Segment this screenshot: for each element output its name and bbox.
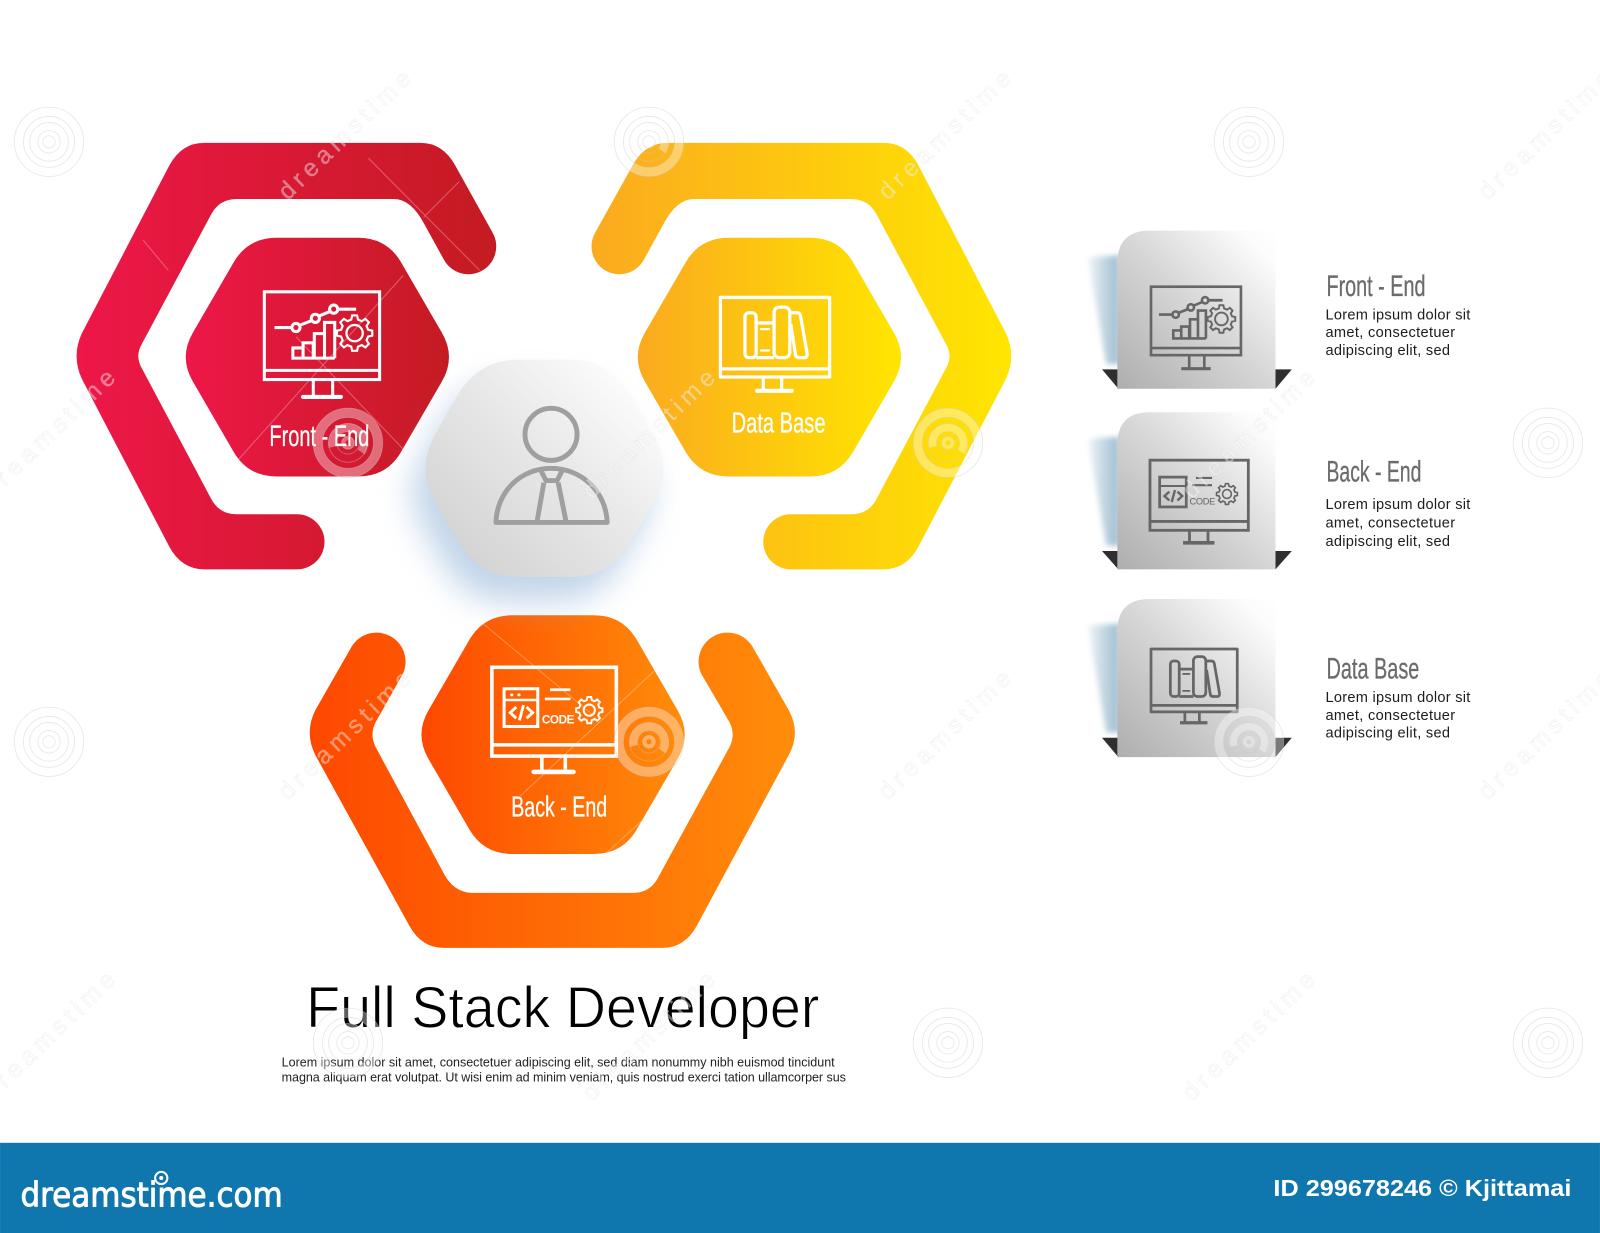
title: Full Stack Developer [306, 975, 819, 1040]
watermark pattern: dreamstime [1177, 966, 1321, 1106]
panel: front-end hexagon [186, 238, 449, 477]
image id and credit: ID 299678246 © Kjittamai [1273, 1175, 1571, 1201]
text block: back-end description [1325, 456, 1470, 550]
logo: dreamstime.com: dreamstime.com [20, 1176, 283, 1215]
text block: front-end description: Front - End [1327, 270, 1425, 303]
text block: data base description: Lorem ipsum dolor sit [1325, 690, 1470, 706]
side card: front-end [1088, 231, 1292, 389]
subtitle text [282, 1055, 846, 1085]
subtitle text: Lorem ipsum dolor sit amet, consectetuer adipiscing elit, sed diam nonummy nibh euismod tincidunt [282, 1055, 835, 1069]
watermark pattern: dreamstime [273, 665, 417, 805]
label: front-end: Front - End [269, 420, 369, 453]
icon: grey monitor with chart [1151, 287, 1241, 369]
text block: data base description: adipiscing elit, sed [1325, 726, 1450, 742]
panel: data base hexagon [638, 238, 901, 477]
panel: back-end outer ring [310, 633, 795, 948]
panel: data base outer ring [592, 143, 1011, 569]
panel: center person hexagon [426, 360, 663, 577]
panel: back-end hexagon [421, 615, 685, 854]
watermark pattern: dreamstime [1177, 364, 1321, 504]
icon: monitor with books [720, 297, 830, 391]
center hexagon shadow [413, 384, 651, 602]
text block: back-end description: adipiscing elit, sed [1325, 534, 1450, 550]
watermark pattern: dreamstime [577, 364, 721, 504]
text block: front-end description: Lorem ipsum dolor sit [1325, 307, 1470, 323]
text block: data base description [1325, 653, 1470, 742]
text block: back-end description: amet, consectetuer [1325, 516, 1455, 532]
text block: front-end description: amet, consectetuer [1325, 325, 1455, 341]
label: back-end: Back - End [511, 791, 607, 823]
icon: grey monitor with code [1150, 460, 1248, 543]
text block: front-end description [1325, 270, 1470, 359]
text block: back-end description: Lorem ipsum dolor sit [1325, 497, 1470, 513]
subtitle text: magna aliquam erat volutpat. Ut wisi enim ad minim veniam, quis nostrud exerci tation ullamcorper sus [282, 1071, 846, 1085]
text block: data base description: amet, consectetuer [1325, 708, 1455, 724]
icon: monitor with code window and gear [492, 667, 616, 772]
icon: grey monitor with books [1151, 649, 1237, 723]
icon: person with tie [496, 408, 607, 522]
watermark pattern: dreamstime [873, 665, 1017, 805]
watermark pattern: dreamstime [873, 65, 1017, 205]
footer band [0, 1143, 1600, 1233]
watermark pattern: dreamstime [577, 966, 721, 1106]
icon: monitor with chart and gear [264, 292, 380, 397]
text block: front-end description: adipiscing elit, sed [1325, 343, 1450, 359]
side card: back-end [1088, 412, 1292, 569]
panel: front-end outer ring [77, 143, 496, 569]
label: data base: Data Base [732, 408, 826, 440]
text block: data base description: Data Base [1327, 653, 1419, 686]
icon: monitor with code window and gear: CODE [542, 713, 575, 726]
side card: data base [1088, 599, 1292, 757]
text block: back-end description: Back - End [1327, 456, 1421, 489]
watermark pattern: dreamstime [273, 65, 417, 205]
icon: grey monitor with code: CODE [1189, 497, 1215, 507]
